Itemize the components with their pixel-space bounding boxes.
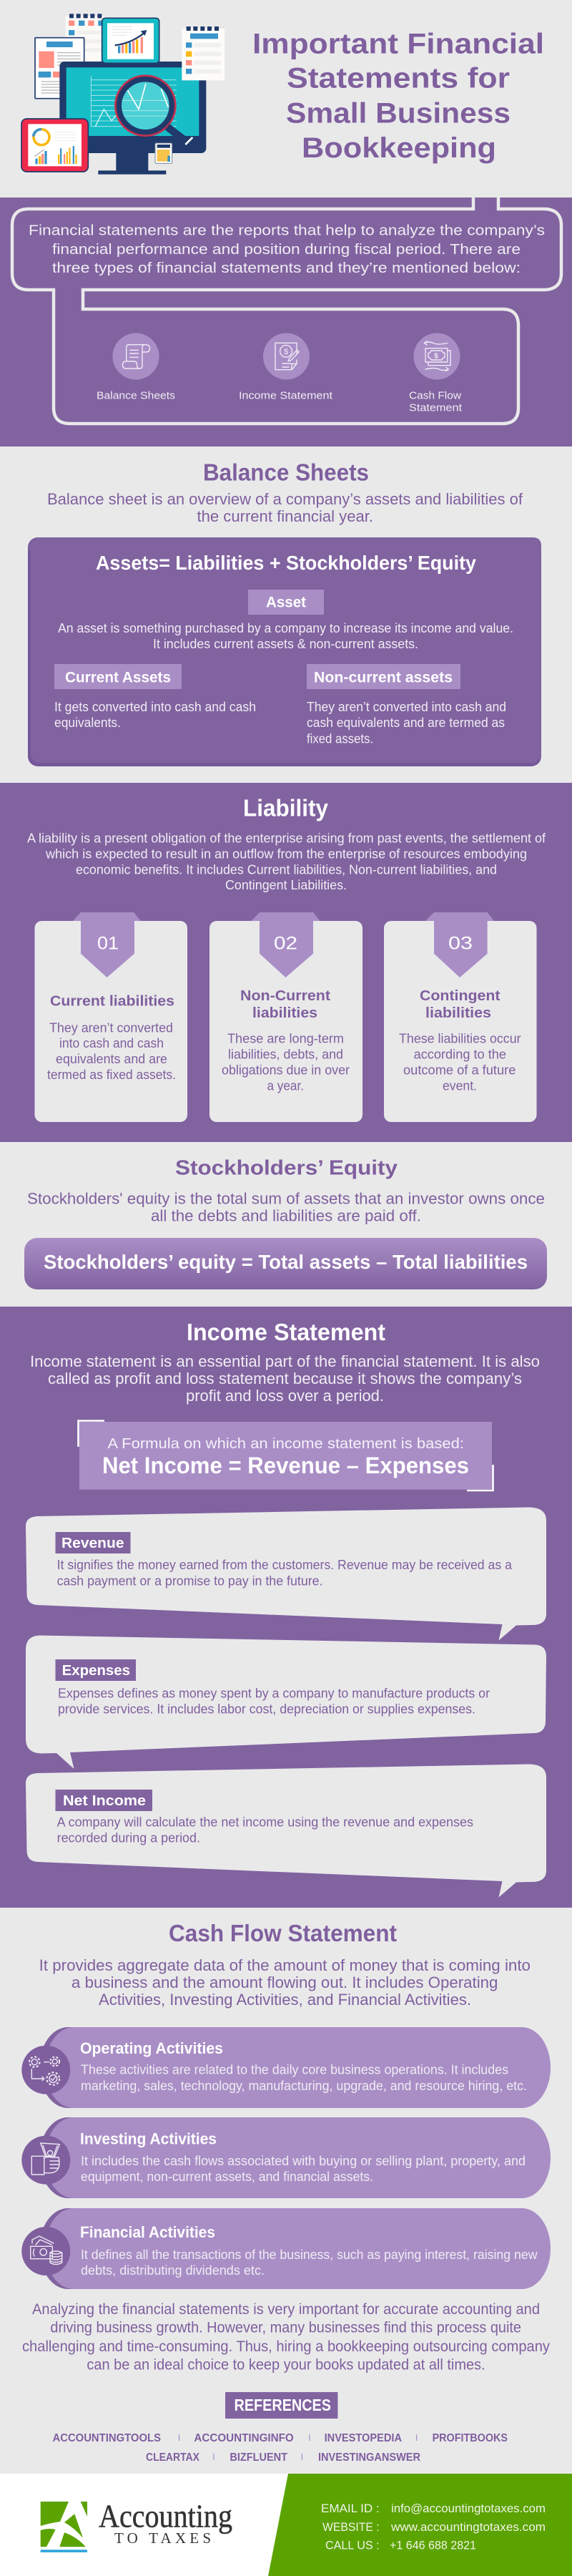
- card: non-current liabilities: [209, 912, 363, 1122]
- card text: liabilities, debts, and: [228, 1047, 343, 1061]
- card title: Current liabilities: [50, 993, 174, 1010]
- label: income statement: Income Statement: [239, 390, 333, 402]
- ribbon: 01: 01: [97, 934, 119, 954]
- label: net income: [56, 1790, 152, 1811]
- title: [252, 28, 544, 164]
- income formula box: Net Income = Revenue – Expenses: [102, 1453, 469, 1478]
- card text: termed as fixed assets.: [47, 1068, 176, 1082]
- card title: Non-Current: [240, 987, 330, 1004]
- card text: according to the: [414, 1047, 506, 1061]
- contact details: +1 646 688 2821: [390, 2539, 476, 2552]
- asset description: An asset is something purchased by a company to increase its income and value.: [58, 621, 513, 635]
- references list: INVESTOPEDIA: [325, 2432, 402, 2444]
- card text: These liabilities occur: [399, 1031, 521, 1045]
- panel: balance sheets section: [28, 459, 541, 766]
- conclusion text: can be an ideal choice to keep your books updated at all times.: [87, 2357, 485, 2373]
- text: marketing, sales, technology, manufacturing, upgrade, and resource hiring, etc.: [81, 2079, 527, 2093]
- pill: investing activities: [21, 2117, 551, 2198]
- balance sheets description: [47, 490, 523, 525]
- non-current assets description: cash equivalents and are termed as: [307, 716, 505, 730]
- contact details: info@accountingtotaxes.com: [391, 2502, 546, 2515]
- icon: income statement document: $: [284, 348, 288, 356]
- pill: operating activities: [21, 2027, 551, 2108]
- label: expenses: Expenses: [62, 1663, 130, 1679]
- label: current assets: Current Assets: [65, 669, 171, 686]
- contact details: www.accountingtotaxes.com: [390, 2520, 546, 2534]
- equity description: Stockholders' equity is the total sum of assets that an investor owns once: [27, 1190, 545, 1208]
- conclusion text: Analyzing the financial statements is very important for accurate accounting and: [32, 2301, 540, 2318]
- icon: income statement document: [263, 333, 310, 379]
- header illustration: monitor, reports and magnifier: [21, 14, 225, 175]
- icon: cash flow banknote: [413, 333, 460, 379]
- label: balance sheets: Balance Sheets: [97, 390, 175, 402]
- card text: obligations due in over: [222, 1063, 350, 1077]
- card title: liabilities: [425, 1005, 491, 1021]
- speech bubble: expenses: [26, 1636, 546, 1769]
- card: contingent liabilities: [384, 912, 536, 1122]
- label: asset: Asset: [266, 594, 306, 610]
- revenue text: It signifies the money earned from the customers. Revenue may be received as a: [57, 1558, 513, 1572]
- ribbon: 03: [425, 912, 494, 977]
- icon: cash flow banknote: $: [434, 352, 438, 360]
- current assets description: [54, 700, 256, 730]
- card text: equivalents and are: [56, 1052, 167, 1066]
- liability description: A liability is a present obligation of the enterprise arising from past events, the settlement of: [27, 831, 546, 845]
- references heading: REFERENCES: [235, 2396, 331, 2414]
- heading: stockholders' equity: Stockholders’ Equity: [175, 1157, 398, 1180]
- asset description: It includes current assets & non-current assets.: [153, 637, 418, 651]
- label: cash flow statement: Statement: [409, 402, 463, 414]
- contact details: CALL US :: [325, 2539, 380, 2552]
- title: Operating Activities: [80, 2039, 223, 2057]
- references list: ACCOUNTINGTOOLS: [53, 2432, 161, 2444]
- cash flow description: It provides aggregate data of the amount of money that is coming into: [39, 1956, 531, 1974]
- text: [81, 2154, 526, 2184]
- label: non-current assets: [307, 664, 460, 689]
- label: revenue: [56, 1532, 130, 1553]
- card text: into cash and cash: [59, 1036, 164, 1050]
- title: Small Business: [286, 98, 511, 130]
- balance sheets description: Balance sheet is an overview of a company’s assets and liabilities of: [47, 490, 523, 508]
- liability description: which is expected to result in an outflow from the enterprise of resources embodying: [45, 847, 527, 861]
- liability description: [27, 831, 546, 892]
- label: non-current assets: Non-current assets: [314, 669, 453, 686]
- icon: gears: [21, 2046, 70, 2094]
- contact details: WEBSITE :: [322, 2520, 380, 2534]
- contact details: [321, 2502, 546, 2552]
- panel: income statement section: [0, 1307, 572, 1908]
- card title: liabilities: [252, 1005, 317, 1021]
- card text: outcome of a future: [403, 1063, 516, 1077]
- logo text: Accounting: [99, 2498, 232, 2534]
- footer: [0, 2474, 572, 2576]
- net income text: [57, 1815, 473, 1845]
- icon: balance sheets scroll: [113, 333, 159, 379]
- card text: event.: [443, 1078, 477, 1093]
- net income text: recorded during a period.: [57, 1831, 200, 1845]
- connector frame outline: [12, 197, 561, 424]
- panel: liability section: [0, 783, 572, 1142]
- panel: cash flow statement section: [21, 1920, 551, 2373]
- non-current assets description: fixed assets.: [307, 731, 373, 746]
- conclusion text: challenging and time-consuming. Thus, hiring a bookkeeping outsourcing company: [22, 2338, 550, 2355]
- intro text: three types of financial statements and they’re mentioned below:: [52, 260, 521, 276]
- income statement description: profit and loss over a period.: [186, 1387, 384, 1405]
- non-current assets description: They aren’t converted into cash and: [307, 700, 506, 714]
- balance sheets description: the current financial year.: [197, 507, 373, 525]
- title: Financial Activities: [80, 2223, 215, 2241]
- title: Important Financial: [252, 28, 544, 59]
- ribbon: 02: [252, 912, 320, 977]
- heading: cash flow statement: Cash Flow Statement: [169, 1920, 397, 1946]
- card text: [399, 1031, 521, 1093]
- label: revenue: Revenue: [61, 1536, 124, 1551]
- panel: assets equation card: [28, 537, 541, 766]
- speech bubble: net income: [26, 1764, 546, 1898]
- current assets description: It gets converted into cash and cash: [54, 700, 256, 714]
- income formula box: A Formula on which an income statement is based:: [107, 1436, 464, 1452]
- text: These activities are related to the daily core business operations. It includes: [81, 2063, 508, 2077]
- cash flow description: a business and the amount flowing out. It includes Operating: [72, 1974, 498, 1991]
- label: asset: [248, 590, 324, 615]
- card: current liabilities: [34, 912, 187, 1122]
- cash flow description: Activities, Investing Activities, and Financial Activities.: [99, 1991, 471, 2009]
- label: net income: Net Income: [63, 1793, 146, 1809]
- card text: [47, 1020, 176, 1082]
- card title: Contingent: [420, 987, 500, 1004]
- ribbon: 01: [73, 912, 141, 977]
- references list: ACCOUNTINGINFO: [194, 2432, 294, 2444]
- icon: cash and coins: [21, 2227, 70, 2275]
- contact details: EMAIL ID :: [321, 2502, 380, 2515]
- asset description: [58, 621, 513, 651]
- card text: These are long-term: [227, 1031, 344, 1045]
- card text: [222, 1031, 350, 1093]
- logo mark: [41, 2502, 87, 2552]
- icon: hand with money: [21, 2136, 70, 2185]
- references list: INVESTINGANSWER: [318, 2451, 420, 2464]
- card text: a year.: [267, 1078, 304, 1093]
- text: It defines all the transactions of the business, such as paying interest, raising new: [81, 2248, 538, 2262]
- text: [81, 2248, 538, 2278]
- expenses text: Expenses defines as money spent by a company to manufacture products or: [58, 1686, 490, 1700]
- references list: [53, 2432, 508, 2464]
- card text: They aren’t converted: [49, 1020, 173, 1035]
- heading: liability: Liability: [243, 795, 329, 821]
- logo text: TO TAXES: [114, 2529, 211, 2547]
- liability description: Contingent Liabilities.: [225, 878, 347, 892]
- card title: [420, 987, 500, 1021]
- speech bubble: revenue: [26, 1507, 546, 1640]
- conclusion text: [22, 2301, 550, 2373]
- equity formula bar: Stockholders’ equity = Total assets – Total liabilities: [44, 1251, 528, 1273]
- income statement description: [30, 1352, 540, 1405]
- intro text: Financial statements are the reports that help to analyze the company’s: [29, 223, 545, 239]
- income statement description: Income statement is an essential part of the financial statement. It is also: [30, 1352, 540, 1370]
- title: Investing Activities: [80, 2130, 217, 2148]
- references list: BIZFLUENT: [230, 2451, 287, 2464]
- expenses text: provide services. It includes labor cost, depreciation or supplies expenses.: [58, 1702, 475, 1716]
- equity description: [27, 1190, 545, 1225]
- label: cash flow statement: Cash Flow: [409, 390, 461, 402]
- references heading: [225, 2392, 337, 2419]
- conclusion text: driving business growth. However, many businesses find this process quite: [50, 2320, 521, 2336]
- equation heading: Assets= Liabilities + Stockholders’ Equity: [96, 552, 476, 574]
- references list: PROFITBOOKS: [433, 2432, 508, 2444]
- equity formula bar: [24, 1238, 547, 1289]
- current assets description: equivalents.: [54, 716, 121, 730]
- income statement description: called as profit and loss statement because it shows the company’s: [48, 1370, 522, 1387]
- text: debts, distributing dividends etc.: [81, 2263, 265, 2278]
- label: cash flow statement: [409, 390, 463, 414]
- logo text: [99, 2498, 232, 2547]
- text: equipment, non-current assets, and financial assets.: [81, 2170, 373, 2184]
- expenses text: [58, 1686, 490, 1716]
- ribbon: 03: 03: [448, 934, 473, 954]
- pill: financial activities: [21, 2208, 551, 2289]
- intro text: [29, 223, 545, 276]
- ribbon: 02: 02: [274, 934, 297, 954]
- liability description: economic benefits. It includes Current liabilities, Non-current liabilities, and: [76, 862, 497, 877]
- references list: CLEARTAX: [146, 2451, 199, 2464]
- revenue text: cash payment or a promise to pay in the future.: [57, 1574, 322, 1588]
- heading: balance sheets: Balance Sheets: [203, 459, 369, 486]
- card title: [240, 987, 330, 1021]
- non-current assets description: [307, 700, 506, 746]
- cash flow description: [39, 1956, 531, 2009]
- panel: stockholders' equity section: [24, 1157, 547, 1289]
- income formula box: [79, 1421, 493, 1491]
- label: current assets: [54, 664, 182, 689]
- heading: income statement: Income Statement: [187, 1319, 385, 1345]
- title: Statements for: [287, 63, 510, 94]
- equity description: all the debts and liabilities are paid off.: [151, 1207, 421, 1225]
- title: Bookkeeping: [302, 132, 496, 164]
- net income text: A company will calculate the net income using the revenue and expenses: [57, 1815, 473, 1829]
- panel: introduction: [0, 197, 572, 447]
- revenue text: [57, 1558, 513, 1588]
- label: expenses: [56, 1659, 136, 1681]
- text: It includes the cash flows associated with buying or selling plant, property, and: [81, 2154, 526, 2168]
- text: [81, 2063, 527, 2093]
- intro text: financial performance and position during fiscal period. There are: [52, 242, 521, 258]
